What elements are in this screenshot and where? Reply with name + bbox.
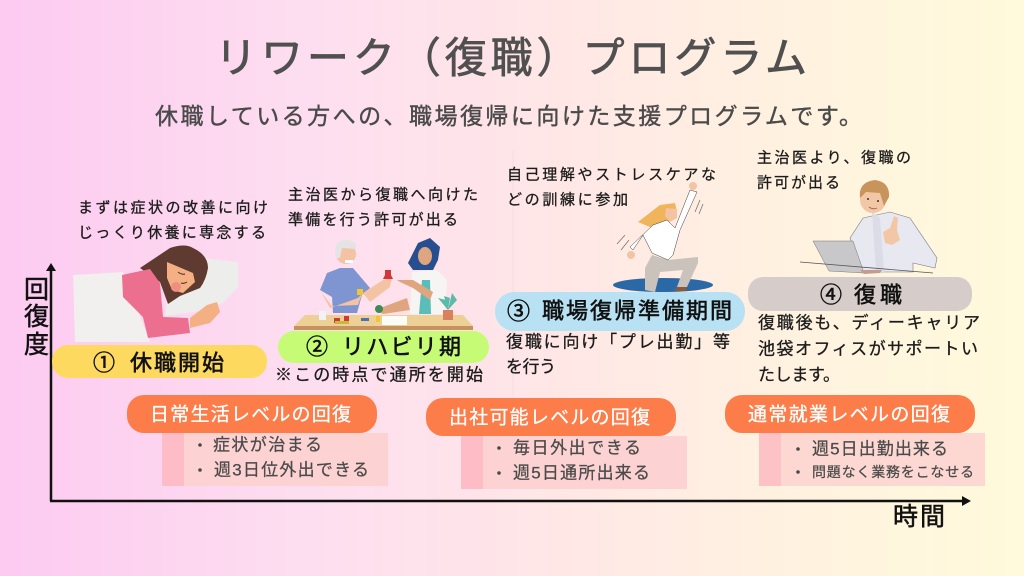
axis label: time: 時間 [893,503,945,531]
step 1 description [78,200,268,242]
step 4 description: 許可が出る [757,174,840,192]
step 2 pill: リハビリ期 [342,334,461,360]
panel: normal work level [725,395,985,486]
axis: time horizontal arrow [50,496,971,506]
step 3 description: どの訓練に参加 [507,192,628,208]
icon: man with laptop thumbs up [800,180,937,274]
level 2 list: 毎日外出できる [513,438,641,458]
level 1 list [162,433,388,486]
step 3 detail [506,332,730,376]
axis label: recovery: 復 [24,303,49,331]
level 3 heading: 通常就業レベルの回復 [748,404,950,426]
panel: step 1 leave start [52,200,268,378]
axis label: recovery: 回 [24,276,49,304]
panel: able to commute level [426,398,687,489]
step 2 note: ※この時点で通所を開始 [275,366,483,384]
title: リワーク（復職）プログラム [215,34,807,82]
axis label: recovery: 度 [24,331,49,359]
step 3 pill: 職場復帰準備期間 [542,298,732,324]
step 4 pill: ④ [820,282,842,308]
step 4 detail: 池袋オフィスがサポートい [758,340,978,358]
step 3 description: 自己理解やストレスケアな [507,166,716,184]
icon: therapist and patient at table [294,238,473,330]
level 1 heading [127,395,377,433]
step 3 pill: ③ [507,298,530,324]
level 2 heading: 出社可能レベルの回復 [449,406,650,428]
axis label: recovery [24,276,49,359]
level 3 list [759,433,985,486]
icon: sleeping woman [73,246,238,342]
step 4 pill: 復職 [854,282,902,308]
step 1 pill [52,345,267,378]
panel: step 4 return to work [748,150,980,384]
step 4 detail: たします。 [758,366,840,384]
level 1 list: 週3日位外出できる [214,460,369,480]
step 4 detail [758,312,980,384]
level 3 list: 問題なく業務をこなせる [812,464,974,480]
step 3 detail: 復職に向け「プレ出勤」等 [506,332,730,352]
panel: step 2 rehabilitation [275,186,489,384]
step 1 description: まずは症状の改善に向け [78,200,268,216]
icon: woman climbing out [613,182,713,292]
step 2 description [288,186,478,228]
step 4 description [757,150,911,192]
subtitle: 休職している方への、職場復帰に向けた支援プログラムです。 [155,103,862,129]
panel: step 3 return preparation [495,166,745,376]
step 2 pill [278,331,489,363]
step 4 detail: 復職後も、ディーキャリア [758,312,980,332]
level 3 list: 週5日出勤出来る [812,440,948,458]
step 1 pill: 休職開始 [130,350,224,376]
level 3 heading [725,395,975,433]
step 2 description: 準備を行う許可が出る [288,212,458,228]
level 1 list: 症状が治まる [213,436,322,454]
axis: recovery vertical arrow [46,263,56,501]
step 3 detail: を行う [506,358,556,376]
step 4 pill [748,277,972,311]
step 1 pill: ① [93,350,115,376]
step 4 description: 主治医より、復職の [757,150,911,166]
step 3 description [507,166,716,208]
level 2 list: 週5日通所出来る [513,464,650,482]
panel: daily life recovery level [127,395,388,486]
step 2 description: 主治医から復職へ向けた [288,186,478,204]
level 2 heading [426,398,676,436]
level 1 heading: 日常生活レベルの回復 [150,404,351,426]
level 2 list [461,436,687,489]
step 1 description: じっくり休養に専念する [78,224,266,242]
step 2 pill: ② [306,334,328,360]
step 3 pill [495,292,745,331]
